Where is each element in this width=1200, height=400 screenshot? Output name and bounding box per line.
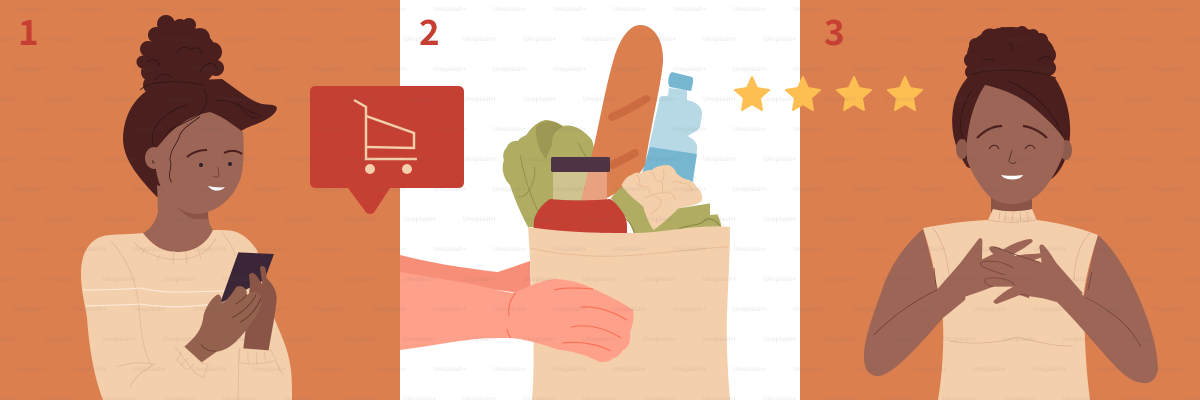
figure: happy woman with hands on chest — [864, 26, 1158, 400]
green leaves — [611, 187, 722, 237]
rating stars — [735, 77, 922, 110]
phone — [220, 252, 274, 303]
face details — [977, 126, 1047, 180]
lettuce veins — [518, 143, 595, 215]
figure: woman using a phone — [81, 15, 292, 400]
chin shadow — [167, 193, 208, 219]
hair strands — [140, 82, 262, 182]
hair — [123, 79, 277, 197]
turtleneck collar — [988, 209, 1037, 222]
star 4 — [888, 77, 922, 110]
hair bun — [964, 26, 1056, 83]
bubble — [310, 86, 464, 214]
clasped hands — [937, 238, 1083, 317]
face details — [187, 150, 242, 191]
step number 3: 3 — [824, 5, 845, 56]
hands silhouette — [937, 238, 1083, 317]
step number 1: 1 — [18, 5, 39, 56]
baguette — [585, 25, 663, 205]
star 1 — [735, 77, 769, 110]
hands, phone and cuffs — [175, 252, 277, 378]
arm crease lines — [874, 268, 1141, 347]
face — [155, 112, 244, 214]
lettuce dark leaf — [536, 121, 563, 159]
sweater stitching — [933, 212, 1090, 346]
cauliflower with leaves — [611, 165, 722, 237]
bag fold line — [530, 247, 728, 256]
ears — [956, 139, 1072, 160]
neck — [143, 185, 213, 252]
front arm and hand — [400, 272, 634, 362]
ear — [145, 147, 163, 169]
star 2 — [786, 77, 820, 110]
hair strands — [960, 44, 1063, 138]
panel: left orange background — [0, 0, 400, 400]
leaf lines — [625, 218, 721, 233]
lettuce — [503, 120, 600, 227]
sweater — [923, 220, 1098, 400]
step number 2: 2 — [419, 5, 440, 56]
front hand — [184, 286, 261, 362]
finger lines — [980, 247, 1040, 297]
hand crease lines — [507, 288, 627, 351]
icon: cart — [354, 100, 417, 174]
face — [967, 85, 1064, 204]
jar — [533, 157, 627, 240]
sweater — [81, 230, 292, 400]
hair bun — [136, 15, 224, 94]
bottle — [640, 72, 702, 190]
finger and wrist lines — [201, 295, 261, 351]
paper bag — [528, 226, 730, 400]
bun curl lines — [147, 47, 217, 80]
panel: right orange background — [800, 0, 1200, 400]
right arm — [1050, 235, 1158, 383]
sweater stripes — [83, 288, 225, 307]
sweater cuffs — [175, 347, 276, 378]
back arm — [400, 255, 531, 295]
neck — [991, 190, 1032, 215]
figure: groceries bag held by a hand — [400, 25, 730, 400]
star 3 — [837, 77, 871, 110]
panel: middle white background — [400, 0, 800, 400]
left arm — [864, 229, 970, 376]
cauliflower curds — [636, 170, 692, 215]
speech bubble with shopping cart — [310, 86, 464, 214]
hair — [952, 70, 1070, 180]
cauliflower head — [622, 165, 702, 230]
back hand — [243, 266, 277, 350]
sweater stitching — [111, 231, 283, 400]
